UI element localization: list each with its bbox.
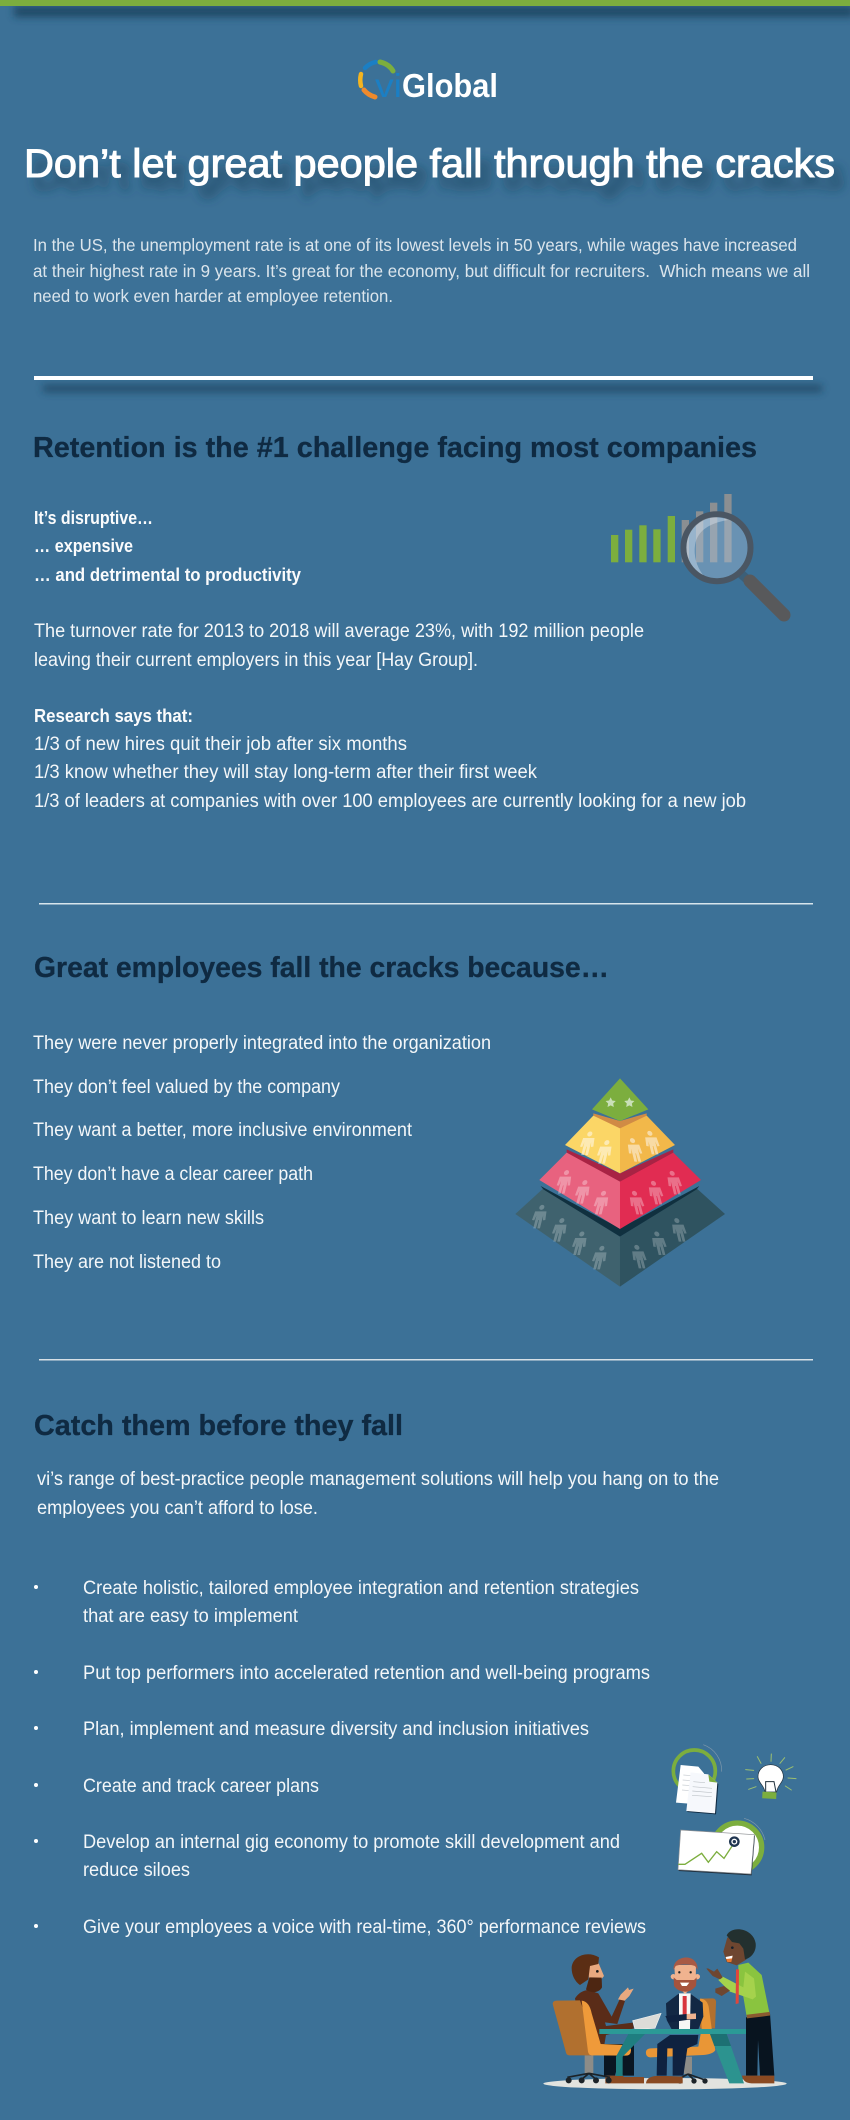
text block: reasons list: They are not listened to <box>33 1252 221 1273</box>
text block: turnover rate: leaving their current employers in this year [Hay Group]. <box>34 650 478 671</box>
text block: turnover rate: The turnover rate for 2013 to 2018 will average 23%, with 192 million people <box>34 621 644 642</box>
text block: solutions intro <box>37 1469 719 1519</box>
illustration: left chair <box>553 2000 631 2083</box>
illustration: tablet <box>633 2013 661 2029</box>
text block: reasons list: They want to learn new skills <box>33 1208 264 1229</box>
list: solutions: Give your employees a voice with real-time, 360° performance reviews <box>83 1917 646 1938</box>
icon: people pyramid <box>515 1078 725 1287</box>
illustration: right man <box>706 1929 774 2083</box>
text block: research: 1/3 of leaders at companies with over 100 employees are currently looking for a new job <box>34 791 746 812</box>
text block: solutions intro: vi’s range of best-practice people management solutions will help you hang on to the <box>37 1469 719 1490</box>
logo: viGlobal <box>360 62 498 104</box>
text block: reasons list <box>33 1033 491 1273</box>
list: solutions: that are easy to implement <box>83 1606 299 1627</box>
divider <box>39 903 813 904</box>
list: solutions: Plan, implement and measure diversity and inclusion initiatives <box>83 1719 589 1740</box>
intro text: In the US, the unemployment rate is at one of its lowest levels in 50 years, while wages have increased <box>33 235 797 255</box>
heading: catch them: Catch them before they fall <box>34 1410 403 1442</box>
text block: research: Research says that: <box>34 706 193 726</box>
illustration: middle man <box>646 1957 703 2083</box>
title: Don’t let great people fall through the cracks <box>24 142 835 186</box>
heading: retention: Retention is the #1 challenge facing most companies <box>33 432 757 464</box>
list: solutions: Create holistic, tailored employee integration and retention strategies <box>83 1578 639 1599</box>
logo: viGlobal: Global <box>402 67 498 104</box>
main divider <box>34 376 822 392</box>
icon: documents, light bulb and chart <box>673 1745 796 1875</box>
text block: disruptive list <box>34 508 301 585</box>
panel: catch them <box>34 1410 796 2089</box>
intro text <box>33 235 810 306</box>
heading: great employees: Great employees fall the cracks because… <box>34 952 609 984</box>
illustration: right chair <box>646 1998 716 2084</box>
text block: reasons list: They were never properly integrated into the organization <box>33 1033 491 1054</box>
logo: viGlobal: vi <box>375 67 402 104</box>
text block: disruptive list: … and detrimental to productivity <box>34 565 301 585</box>
text block: research <box>34 706 746 812</box>
illustration: left man <box>572 1954 644 2083</box>
list: solutions: Create and track career plans <box>83 1776 319 1797</box>
text block: research: 1/3 know whether they will stay long-term after their first week <box>34 762 537 783</box>
illustration: three colleagues meeting at a table <box>543 1929 787 2089</box>
icon: bar chart with magnifying glass <box>611 494 784 615</box>
intro text: need to work even harder at employee retention. <box>33 286 393 306</box>
list: solutions: reduce siloes <box>83 1860 190 1881</box>
text block: reasons list: They don’t feel valued by the company <box>33 1077 340 1098</box>
panel: why employees fall <box>33 952 725 1287</box>
intro text: at their highest rate in 9 years. It’s great for the economy, but difficult for recruiters. Which means we all <box>33 261 810 281</box>
text block: turnover rate <box>34 621 644 671</box>
text block: reasons list: They don’t have a clear career path <box>33 1164 313 1185</box>
text block: solutions intro: employees you can’t afford to lose. <box>37 1498 318 1519</box>
list: solutions: Develop an internal gig economy to promote skill development and <box>83 1832 620 1853</box>
illustration: table <box>599 2029 750 2083</box>
divider <box>39 1359 813 1360</box>
text block: disruptive list: … expensive <box>34 536 133 556</box>
text block: reasons list: They want a better, more inclusive environment <box>33 1120 413 1141</box>
panel: retention challenge <box>33 432 784 812</box>
list: solutions: Put top performers into accelerated retention and well-being programs <box>83 1663 650 1684</box>
top accent bar <box>0 0 850 17</box>
list: solutions <box>34 1578 650 1938</box>
text block: disruptive list: It’s disruptive… <box>34 508 153 528</box>
text block: research: 1/3 of new hires quit their job after six months <box>34 734 407 755</box>
